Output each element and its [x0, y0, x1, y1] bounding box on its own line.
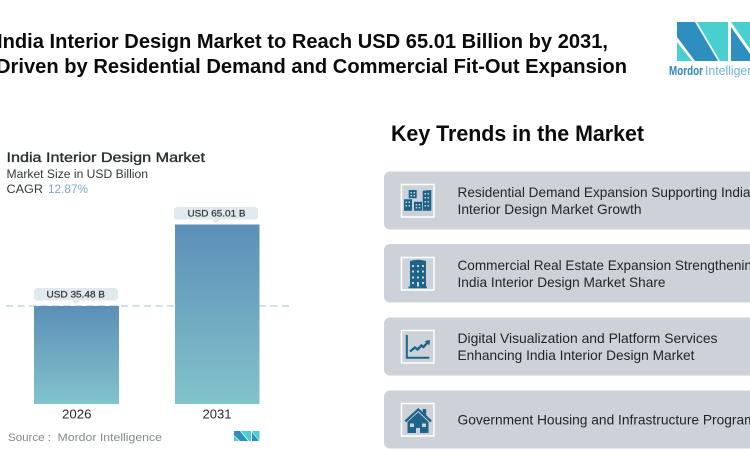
value label: 2026 [34, 288, 118, 304]
title: Driven by Residential Demand and Commercial Fit-Out Expansion [0, 55, 627, 78]
source note: Mordor Intelligence [58, 432, 162, 444]
panel: commercial real estate [384, 244, 750, 302]
chart heading: Market Size in USD Billion [6, 169, 148, 181]
trend text [458, 330, 718, 363]
chart heading: India Interior Design Market [6, 150, 205, 165]
panel: government housing [384, 390, 750, 448]
bar: 2031 [175, 224, 260, 404]
axis label: 2026: 2026 [62, 408, 92, 422]
panel: residential demand [384, 172, 750, 230]
section heading: key trends: Key Trends in the Market [391, 121, 645, 146]
bar chart [6, 207, 290, 422]
trend text [458, 257, 750, 290]
icon: growth chart [402, 330, 434, 363]
value label: 2026: USD 35.48 B [46, 290, 105, 300]
title [0, 30, 627, 78]
trend text: India Interior Design Market Share [458, 274, 666, 290]
value label: 2031 [174, 207, 258, 223]
icon: office tower [402, 258, 434, 290]
chart heading: 12.87% [48, 184, 88, 196]
title: India Interior Design Market to Reach USD 65.01 Billion by 2031, [0, 30, 608, 53]
source note [8, 432, 162, 444]
trend text: Residential Demand Expansion Supporting India [458, 184, 750, 200]
axis label: 2031: 2031 [202, 408, 232, 422]
logo: Mordor Intelligence [669, 22, 750, 78]
value label: 2031: USD 65.01 B [188, 208, 246, 220]
logo: Mordor Intelligence: Mordor [669, 64, 703, 78]
panel: digital visualization [384, 318, 750, 376]
chart heading: CAGR [6, 184, 43, 196]
trend text [458, 184, 750, 217]
chart heading [6, 150, 205, 196]
trend text: Interior Design Market Growth [458, 201, 642, 217]
source note: Source : [8, 432, 51, 444]
icon: city buildings [402, 184, 434, 217]
trend text: Digital Visualization and Platform Services [458, 330, 718, 346]
trend text: Enhancing India Interior Design Market [458, 347, 695, 363]
icon: house [402, 404, 434, 436]
bar: 2026 [34, 306, 119, 404]
small logo [234, 431, 260, 441]
